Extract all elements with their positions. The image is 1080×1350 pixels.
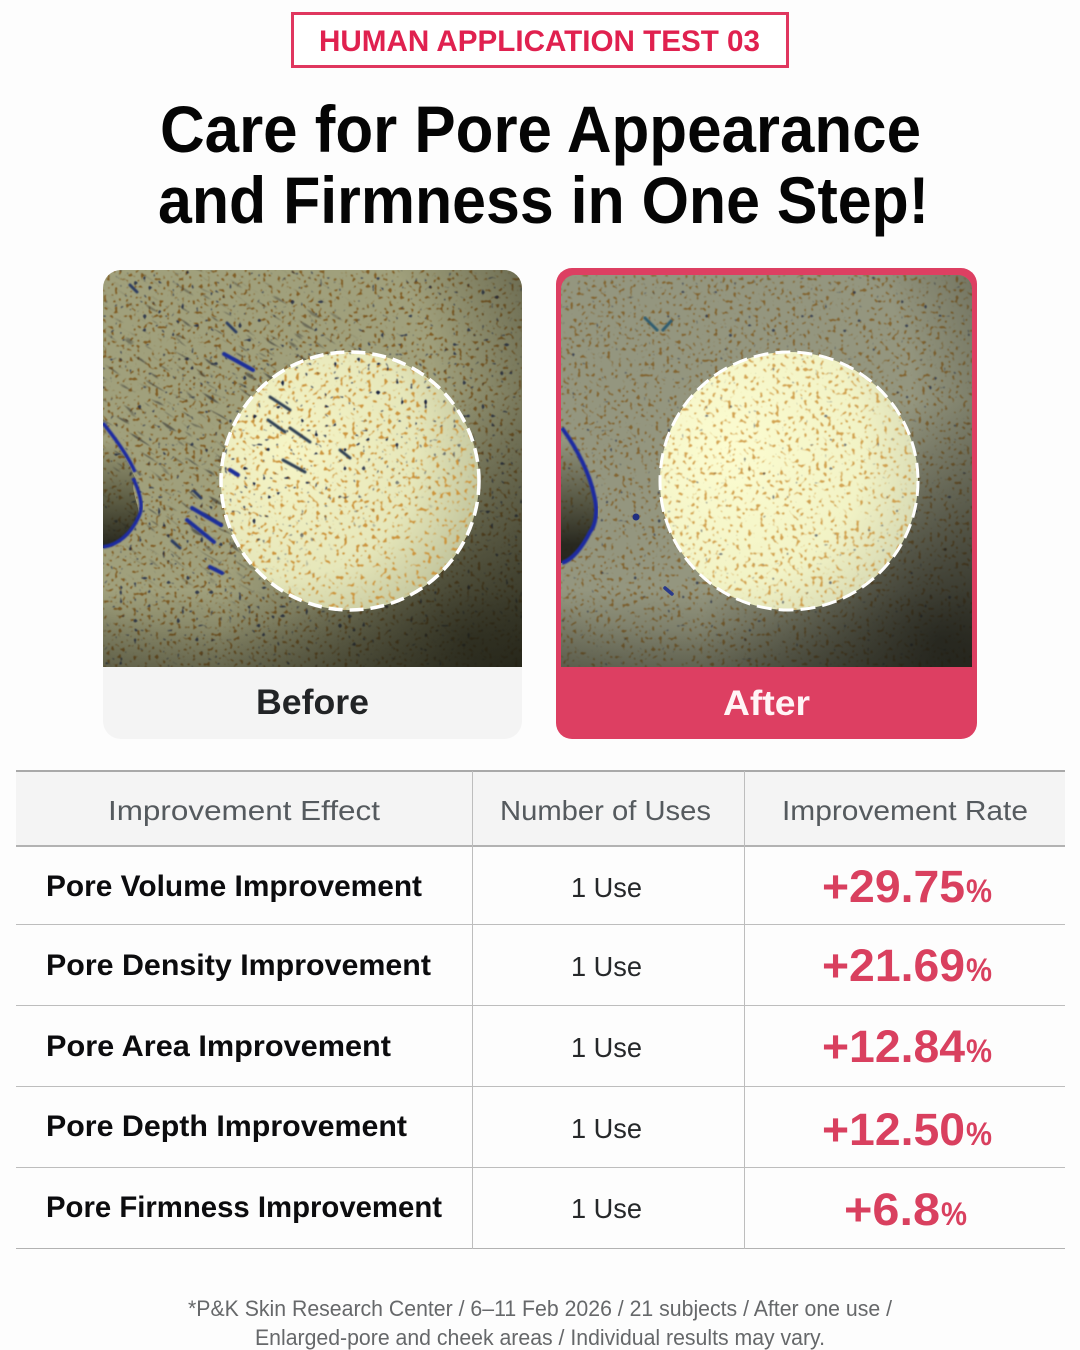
- table header row: Improvement Effect: [108, 795, 380, 826]
- title: Care for Pore Appearance: [160, 92, 921, 166]
- row: pore area: %: [966, 1033, 992, 1069]
- results table: [16, 770, 1065, 1249]
- skin microscope image: after: [561, 275, 972, 667]
- row: pore depth: 1 Use: [571, 1113, 642, 1144]
- footnote: [188, 1296, 893, 1350]
- row: pore density: +21.69: [822, 940, 965, 991]
- row: pore volume: [46, 861, 992, 912]
- row: pore depth: +12.50: [822, 1104, 965, 1155]
- row: pore density: 1 Use: [571, 951, 642, 982]
- magnified circle: before: [221, 352, 479, 610]
- footnote: Enlarged-pore and cheek areas / Individual results may vary.: [255, 1325, 825, 1350]
- panel: before: [103, 270, 522, 739]
- row: pore firmness: 1 Use: [571, 1193, 642, 1224]
- row: pore density: %: [966, 952, 992, 988]
- row: pore depth: [46, 1104, 992, 1155]
- row: pore firmness: +6.8: [844, 1184, 940, 1235]
- magnified circle: after: [660, 352, 918, 610]
- row: pore firmness: %: [941, 1196, 967, 1232]
- table header row: Improvement Rate: [782, 795, 1028, 826]
- row: pore area: +12.84: [822, 1021, 965, 1072]
- panel: after: [556, 268, 977, 739]
- row: pore firmness: [46, 1184, 967, 1235]
- row: pore volume: Pore Volume Improvement: [46, 870, 422, 903]
- row: pore volume: 1 Use: [571, 872, 642, 903]
- row: pore area: [46, 1021, 992, 1072]
- row: pore firmness: Pore Firmness Improvement: [46, 1191, 442, 1224]
- row: pore depth: %: [966, 1116, 992, 1152]
- label: Before: Before: [256, 683, 369, 722]
- skin microscope image: before: [103, 270, 522, 667]
- table header row: Number of Uses: [500, 795, 711, 826]
- title: [158, 92, 929, 237]
- row: pore density: Pore Density Improvement: [46, 949, 431, 982]
- row: pore density: [46, 940, 992, 991]
- badge: Human Application Test 03: [292, 14, 788, 66]
- label: After: After: [723, 684, 810, 723]
- badge: Human Application Test 03: HUMAN APPLICATION TEST 03: [319, 25, 760, 58]
- row: pore area: 1 Use: [571, 1032, 642, 1063]
- row: pore volume: +29.75: [822, 861, 965, 912]
- row: pore depth: Pore Depth Improvement: [46, 1110, 407, 1143]
- title: and Firmness in One Step!: [158, 163, 929, 237]
- row: pore area: Pore Area Improvement: [46, 1030, 391, 1063]
- footnote: *P&K Skin Research Center / 6–11 Feb 2026 / 21 subjects / After one use /: [188, 1296, 893, 1321]
- row: pore volume: %: [966, 873, 992, 909]
- table header row: [16, 772, 1065, 846]
